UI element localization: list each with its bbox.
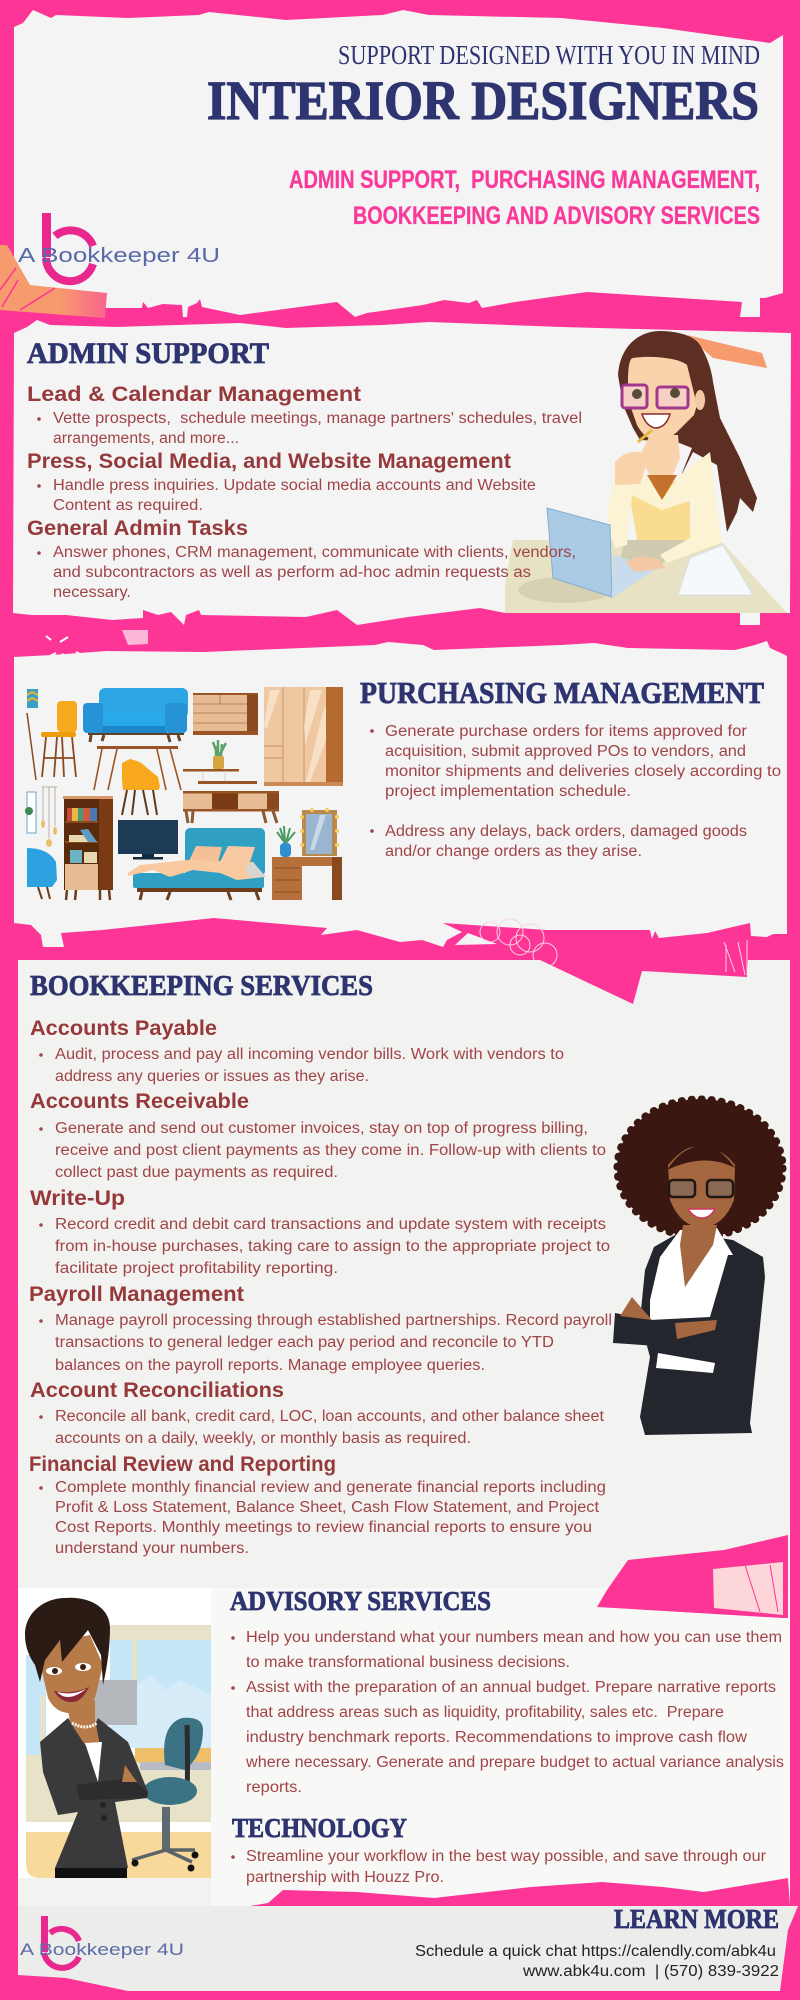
illustration: woman in office [18,1588,211,1878]
logo: footer: A Bookkeeper 4U [20,1941,184,1959]
decoration: pink torn shape with light pink block [597,1535,788,1618]
illustration: woman with curly hair [613,1099,783,1435]
contact: calendly: Schedule a quick chat https://calendly.com/abk4u [415,1943,776,1960]
text: accounts receivable: Generate and send out customer invoices, stay on top of progress billing, [55,1120,588,1137]
text: financial review and reporting: Complete monthly financial review and generate financial reports including [55,1479,606,1496]
title: INTERIOR DESIGNERS [207,70,759,131]
text: technology bullet: Streamline your workflow in the best way possible, and save through our [246,1848,766,1865]
text: accounts receivable: collect past due payments as required. [55,1164,338,1181]
heading: admin support: ADMIN SUPPORT [27,337,269,370]
text: financial review and reporting: Cost Reports. Monthly meetings to review financial reports to ensure you [55,1519,592,1536]
logo: footer [20,1916,184,1968]
text: technology bullet [231,1848,766,1886]
decoration: pattern on pink band [480,919,747,975]
illustration: woman with laptop [505,331,787,613]
text: financial review and reporting [29,1453,606,1557]
text: purchasing bullet one: acquisition, submit approved POs to vendors, and [385,743,746,760]
text: accounts payable: Audit, process and pay all incoming vendor bills. Work with vendors to [55,1046,564,1063]
panel: purchasing management [14,641,787,947]
decoration: sparkles and sliver [46,630,148,665]
text: purchasing bullet two: and/or change orders as they arise. [385,843,642,860]
text: lead and calendar management: Lead & Calendar Management [27,383,361,406]
text: advisory bullet two: that address areas such as liquidity, profitability, sales etc. Prepare [246,1704,724,1721]
text: advisory bullet one [231,1629,782,1671]
text: general admin tasks [27,517,576,601]
text: press, social media [27,450,536,514]
text: payroll management: balances on the payroll reports. Manage employee queries. [55,1357,485,1374]
decoration: pink torn band [250,1878,790,1906]
text: payroll management [29,1283,612,1374]
text: accounts receivable [30,1090,606,1181]
text: accounts receivable: receive and post client payments as they come in. Follow-up with clients to [55,1142,606,1159]
text: advisory bullet one: Help you understand what your numbers mean and how you can use them [246,1629,782,1646]
text: account reconciliations [30,1379,605,1447]
text: advisory bullet two: reports. [246,1779,302,1796]
text: general admin tasks: General Admin Tasks [27,517,248,540]
text: general admin tasks: Answer phones, CRM management, communicate with clients, vendors, [53,544,576,561]
heading: bookkeeping services: BOOKKEEPING SERVICES [30,970,373,1002]
text: write-up: Record credit and debit card transactions and update system with receipts [55,1216,606,1233]
text: purchasing bullet one: monitor shipments and deliveries closely according to [385,763,781,780]
text: write-up: from in-house purchases, taking care to assign to the appropriate project to [55,1238,610,1255]
text: purchasing bullet one: Generate purchase orders for items approved for [385,723,747,740]
text: accounts payable [30,1017,564,1085]
text: advisory bullet two: Assist with the preparation of an annual budget. Prepare narrative reports [246,1679,776,1696]
text: lead and calendar management: Vette prospects, schedule meetings, manage partners' schedules, travel [53,410,582,427]
text: financial review and reporting: Financial Review and Reporting [29,1453,336,1476]
text: account reconciliations: Reconcile all bank, credit card, LOC, loan accounts, and other balance sheet [55,1408,605,1425]
text: purchasing bullet one: project implementation schedule. [385,783,631,800]
heading: purchasing management: PURCHASING MANAGEMENT [360,675,764,710]
panel: admin support [13,320,791,625]
text: purchasing bullet two: Address any delays, back orders, damaged goods [385,823,747,840]
advisory background [211,1588,790,1906]
text: accounts payable: address any queries or issues as they arise. [55,1068,369,1085]
text: advisory bullet one: to make transformational business decisions. [246,1654,570,1671]
text: payroll management: Manage payroll processing through established partnerships. Record payroll [55,1312,612,1329]
illustration: furniture collection [25,687,343,900]
text: financial review and reporting: Profit & Loss Statement, Balance Sheet, Cash Flow Statement, and Project [55,1499,600,1516]
logo: A Bookkeeper 4U: A Bookkeeper 4U [18,245,220,267]
text: press, social media: Handle press inquiries. Update social media accounts and Website [53,477,536,494]
text: payroll management: transactions to general ledger each pay period and reconcile to YTD [55,1334,554,1351]
text: purchasing bullet one [370,723,781,800]
heading: technology: TECHNOLOGY [232,1813,407,1843]
text: financial review and reporting: understand your numbers. [55,1540,249,1557]
contact: web and phone: www.abk4u.com | (570) 839-3922 [522,1963,779,1980]
text: press, social media: Press, Social Media, and Website Management [27,450,511,473]
panel: header [0,10,783,318]
text: general admin tasks: necessary. [53,584,131,601]
text: accounts receivable: Accounts Receivable [30,1090,249,1113]
text: press, social media: Content as required. [53,497,203,514]
logo: A Bookkeeper 4U [18,213,220,281]
text: write-up: Write-Up [30,1187,125,1210]
text: technology bullet: partnership with Houzz Pro. [246,1869,444,1886]
heading: advisory services: ADVISORY SERVICES [230,1586,491,1616]
text: advisory bullet two [231,1679,784,1796]
text: write-up: facilitate project profitability reporting. [55,1260,338,1277]
text: account reconciliations: accounts on a daily, weekly, or monthly basis as required. [55,1430,471,1447]
text: purchasing bullet two [370,823,747,860]
text: payroll management: Payroll Management [29,1283,244,1306]
text: advisory bullet two: where necessary. Generate and prepare budget to actual variance analysis [245,1754,784,1771]
panel: bookkeeping services [18,960,790,1906]
text: accounts payable: Accounts Payable [30,1017,217,1040]
text: lead and calendar management: arrangements, and more... [53,430,239,447]
text: account reconciliations: Account Reconciliations [30,1379,284,1402]
text: advisory bullet two: industry benchmark reports. Recommendations to improve cash flow [246,1729,748,1746]
text: lead and calendar management [27,383,582,447]
text: general admin tasks: and subcontractors as well as perform ad-hoc admin requests as [53,564,531,581]
orange torn accent [0,245,107,318]
text: write-up [30,1187,610,1277]
panel: footer [18,1904,798,1991]
heading: learn more: LEARN MORE [614,1904,779,1934]
